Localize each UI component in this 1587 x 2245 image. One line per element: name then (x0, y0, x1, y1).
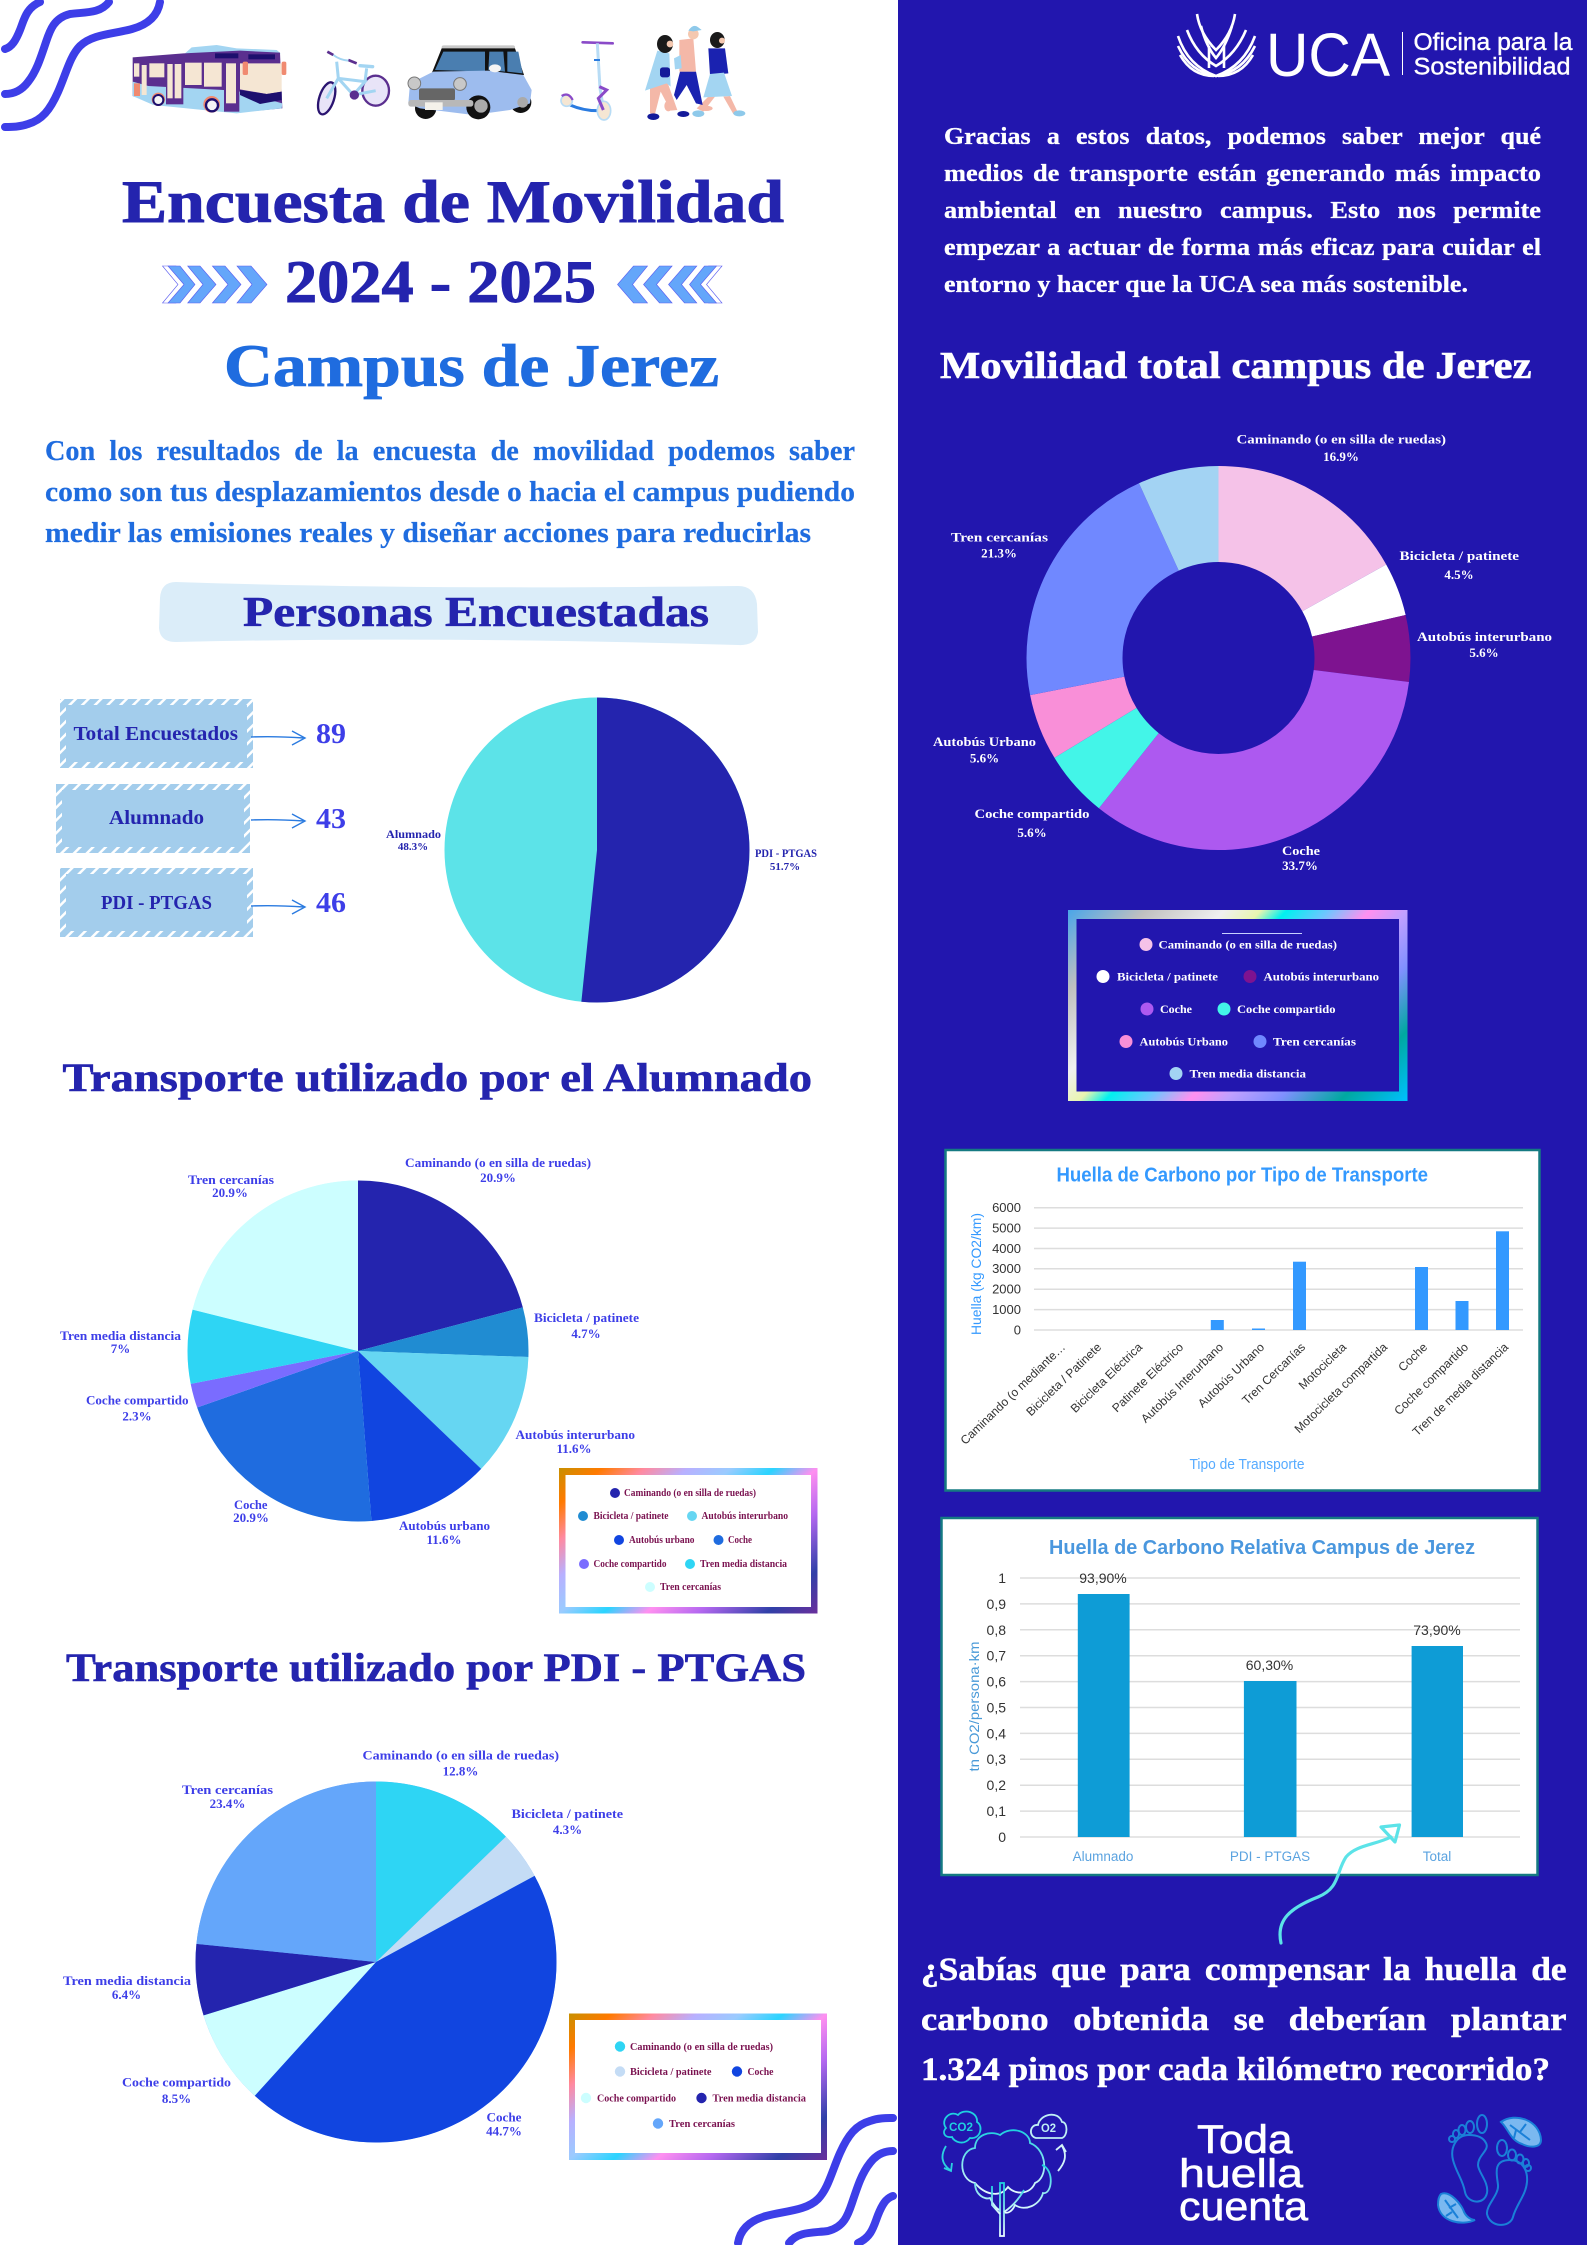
text block: right intro paragraph: medios de transporte están generando más impacto (944, 161, 1541, 187)
y axis labels: 0,8 (987, 1622, 1006, 1638)
text block: right intro paragraph: Gracias a estos datos, podemos saber mejor qué (944, 124, 1541, 150)
text block: right intro paragraph: entorno y hacer que la UCA sea más sostenible. (944, 272, 1468, 298)
pie labels: alumnado: Bicicleta / patinete (534, 1310, 639, 1325)
legend: movilidad total: Bicicleta / patinete (1117, 972, 1218, 984)
logo: Toda huella cuenta: cuenta (1179, 2185, 1309, 2229)
panel: bar chart huella relativa (942, 1518, 1538, 1875)
pie labels: PDI - PTGAS: Tren media distancia (63, 1973, 192, 1988)
logo: Toda huella cuenta: huella (1179, 2152, 1304, 2196)
text block: pinos question: ¿Sabías que para compensar la huella de (921, 1952, 1566, 1988)
pie labels: PDI - PTGAS: 4.3% (553, 1822, 582, 1837)
icon: footprints with leaves (1438, 2115, 1541, 2225)
text block: intro paragraph: Con los resultados de la encuesta de movilidad podemos saber (45, 436, 855, 467)
y axis labels: 0,9 (987, 1596, 1006, 1612)
donut labels: Tren cercanías (951, 530, 1048, 544)
legend: PDI - PTGAS: Bicicleta / patinete (630, 2067, 712, 2078)
label: Alumnado 48.3% (386, 829, 441, 853)
arrow: curved cyan arrow (1280, 1825, 1400, 1943)
pie labels: PDI - PTGAS: 23.4% (210, 1796, 245, 1811)
y axis title: Huella (kg CO2/km) (968, 1213, 984, 1335)
y axis labels (987, 1570, 1006, 1845)
x axis labels (1073, 1849, 1451, 1864)
pie labels: PDI - PTGAS: Coche (486, 2110, 522, 2124)
donut labels: 33.7% (1282, 858, 1318, 873)
pie labels: alumnado: 2.3% (122, 1408, 152, 1424)
pie labels: PDI - PTGAS: Caminando (o en silla de ruedas) (362, 1748, 559, 1762)
donut chart: movilidad total (1026, 466, 1410, 850)
arrow to 89 (251, 731, 305, 745)
legend: movilidad total: Autobús interurbano (1264, 972, 1379, 984)
donut labels: 5.6% (1469, 645, 1499, 660)
text block: pinos question (921, 1952, 1566, 2088)
y axis labels: 0,1 (987, 1803, 1006, 1819)
title: 2024 - 2025: 2024 - 2025 (285, 249, 596, 315)
x axis title: Tipo de Transporte (1190, 1456, 1304, 1473)
icon: chevrons right (618, 266, 722, 303)
legend: PDI - PTGAS: Caminando (o en silla de ruedas) (630, 2042, 773, 2053)
y axis title: tn CO2/persona·km (966, 1642, 982, 1772)
data labels: 60,30% (1246, 1657, 1293, 1673)
heading: Movilidad total campus de Jerez: Movilidad total campus de Jerez (940, 345, 1532, 387)
x axis labels: Motocicleta compartida (1292, 1340, 1390, 1436)
legend: alumnado: Caminando (o en silla de ruedas) (624, 1488, 756, 1499)
heading: Transporte utilizado por PDI - PTGAS: Transporte utilizado por PDI - PTGAS (66, 1645, 806, 1690)
pie labels: PDI - PTGAS: Coche compartido (122, 2074, 231, 2090)
legend: alumnado: Autobús urbano (629, 1535, 694, 1546)
data labels: 93,90% (1079, 1570, 1127, 1586)
legend: movilidad total: Caminando (o en silla de ruedas) (1158, 940, 1337, 952)
y axis labels: 1 (998, 1570, 1006, 1586)
logo: Oficina para la Sostenibilidad: Oficina para la (1414, 29, 1573, 56)
x axis labels: Coche (1395, 1340, 1430, 1374)
decoration: top-left waves (5, 2, 160, 127)
chart title: Huella de Carbono Relativa Campus de Jerez (1049, 1537, 1475, 1559)
text block: pinos question: 1.324 pinos por cada kilómetro recorrido? (921, 2052, 1550, 2088)
legend: alumnado: Tren media distancia (700, 1559, 787, 1570)
y axis labels: 0 (1014, 1322, 1021, 1338)
logo: Oficina para la Sostenibilidad (1402, 29, 1573, 80)
donut labels: 4.5% (1444, 567, 1474, 582)
x axis labels: Autobús Interurbano (1138, 1340, 1226, 1426)
box: PDI - PTGAS (66, 874, 247, 931)
legend: alumnado: Tren cercanías (660, 1582, 721, 1593)
number: 46: 46 (316, 888, 346, 919)
text block: right intro paragraph: empezar a actuar de forma más eficaz para cuidar el (944, 235, 1541, 261)
legend: PDI - PTGAS: Tren media distancia (712, 2094, 806, 2104)
pie labels: alumnado: 20.9% (212, 1185, 248, 1200)
text block: pinos question: carbono obtenida se deberían plantar (921, 2002, 1566, 2038)
pie labels: alumnado: Tren cercanías (188, 1172, 274, 1187)
icon: blue car (408, 45, 532, 119)
pie chart: alumnado (188, 1180, 528, 1522)
label: O2: O2 (1041, 2123, 1056, 2135)
y axis labels: 4000 (992, 1241, 1021, 1256)
donut labels: Coche (1282, 843, 1320, 858)
pie labels: alumnado: Tren media distancia (60, 1328, 182, 1343)
text block: intro paragraph: medir las emisiones reales y diseñar acciones para reducirlas (45, 518, 811, 549)
logo: Toda huella cuenta (1179, 2118, 1309, 2229)
pie labels: alumnado: Autobús interurbano (516, 1427, 635, 1442)
donut labels: Bicicleta / patinete (1400, 548, 1519, 563)
legend: alumnado: Autobús interurbano (702, 1511, 788, 1522)
legend: alumnado: Coche compartido (594, 1559, 666, 1570)
pie labels: PDI - PTGAS: 44.7% (486, 2124, 522, 2138)
pie chart: PDI - PTGAS (196, 1782, 556, 2142)
legend: movilidad total: Tren cercanías (1273, 1036, 1357, 1048)
donut labels: Autobús Urbano (933, 734, 1036, 749)
x axis labels: Coche compartido (1391, 1340, 1471, 1418)
y axis labels: 0,6 (987, 1674, 1006, 1690)
label: CO2: CO2 (949, 2122, 973, 2134)
legend: movilidad total: Autobús Urbano (1140, 1036, 1228, 1048)
x axis labels: Autobús Urbano (1195, 1340, 1267, 1410)
bars (1078, 1594, 1463, 1837)
pie labels: alumnado: 11.6% (556, 1441, 592, 1456)
text block: right intro paragraph: ambiental en nuestro campus. Esto nos permite (944, 198, 1541, 224)
y axis labels: 0,5 (987, 1700, 1006, 1716)
legend: PDI - PTGAS: Tren cercanías (669, 2119, 735, 2130)
heading: Transporte utilizado por el Alumnado: Transporte utilizado por el Alumnado (62, 1055, 812, 1100)
pie labels: PDI - PTGAS: 6.4% (112, 1987, 141, 2002)
panel: right blue column (898, 0, 1587, 2245)
legend: alumnado: Coche (728, 1535, 752, 1546)
pie labels: alumnado: Coche (234, 1497, 268, 1512)
donut labels: Autobús interurbano (1417, 629, 1552, 644)
donut labels: 21.3% (981, 546, 1017, 560)
data labels: 73,90% (1413, 1622, 1461, 1638)
x axis labels: Alumnado (1073, 1849, 1133, 1864)
arrow to 46 (251, 900, 305, 914)
y axis labels: 3000 (992, 1261, 1021, 1276)
donut labels: 5.6% (970, 750, 999, 766)
text block: intro paragraph: como son tus desplazamientos desde o hacia el campus pudiendo (45, 477, 855, 508)
pie labels: alumnado: 7% (111, 1341, 130, 1356)
label: Alumnado 48.3%: Alumnado (386, 829, 441, 841)
donut labels: 16.9% (1323, 449, 1359, 464)
pie labels: alumnado (60, 1155, 639, 1547)
label: PDI - PTGAS 51.7%: 51.7% (770, 861, 800, 873)
pie labels: PDI - PTGAS: 8.5% (162, 2091, 191, 2106)
y axis labels: 0,3 (987, 1751, 1006, 1767)
panel: survey counts (62, 705, 346, 931)
icon: scooter (561, 42, 613, 120)
pie labels: alumnado: Autobús urbano (399, 1518, 490, 1533)
pie labels: PDI - PTGAS: Bicicleta / patinete (512, 1806, 623, 1821)
box: Alumnado (62, 790, 244, 847)
donut labels (933, 432, 1552, 873)
legend: alumnado (559, 1468, 818, 1614)
title: Encuesta de Movilidad: Encuesta de Movilidad (122, 169, 784, 235)
x axis labels (958, 1340, 1511, 1447)
pie labels: alumnado: 4.7% (571, 1326, 601, 1341)
y axis labels: 0,4 (987, 1726, 1006, 1742)
donut labels: 5.6% (1017, 825, 1047, 840)
y axis labels: 6000 (992, 1200, 1021, 1215)
box: PDI - PTGAS: PDI - PTGAS (101, 892, 212, 914)
x axis labels: Caminando (o mediante… (958, 1340, 1068, 1447)
logo: Toda huella cuenta: Toda (1197, 2118, 1293, 2162)
x axis labels: Total (1423, 1849, 1451, 1864)
pie labels: alumnado: 20.9% (233, 1510, 269, 1525)
label: PDI - PTGAS 51.7%: PDI - PTGAS (755, 848, 817, 860)
chart title: Huella de Carbono por Tipo de Transporte (1056, 1164, 1428, 1186)
panel: bar chart huella por tipo de transporte (946, 1150, 1540, 1490)
box: Alumnado: Alumnado (109, 807, 204, 829)
label: PDI - PTGAS 51.7% (755, 848, 817, 873)
pie labels: alumnado: 11.6% (426, 1532, 462, 1547)
x axis labels: Tren Cercanías (1239, 1340, 1308, 1407)
legend: movilidad total (1068, 910, 1408, 1101)
y axis labels: 0,7 (987, 1648, 1006, 1664)
donut labels: Caminando (o en silla de ruedas) (1236, 432, 1446, 446)
icon: bicycle (315, 52, 389, 116)
heading: Personas Encuestadas: Personas Encuestadas (243, 590, 709, 636)
label: Alumnado 48.3%: 48.3% (398, 841, 428, 853)
pill: Personas Encuestadas (159, 582, 758, 645)
icon: chevrons left (162, 266, 267, 303)
donut labels: Coche compartido (974, 806, 1090, 821)
y axis labels: 0 (998, 1829, 1006, 1845)
box: Total Encuestados (66, 705, 247, 762)
pie labels: alumnado: Caminando (o en silla de ruedas) (405, 1155, 591, 1170)
box: Total Encuestados: Total Encuestados (74, 723, 238, 745)
legend: PDI - PTGAS: Coche (748, 2067, 774, 2078)
number: 89: 89 (316, 719, 346, 750)
subtitle: Campus de Jerez: Campus de Jerez (224, 333, 719, 399)
icon: bus (133, 45, 286, 113)
x axis labels: Bicicleta Eléctrica (1068, 1340, 1145, 1415)
text block: right intro paragraph (944, 124, 1541, 298)
y axis labels: 5000 (992, 1220, 1021, 1236)
legend: movilidad total: Tren media distancia (1190, 1068, 1306, 1080)
legend: movilidad total: Coche (1160, 1004, 1192, 1016)
icon: three walking people (645, 26, 745, 120)
arrow to 43 (251, 814, 305, 828)
y axis labels: 2000 (992, 1282, 1021, 1296)
pie labels: PDI - PTGAS: 12.8% (443, 1764, 478, 1778)
pie labels: alumnado: 20.9% (480, 1170, 516, 1185)
legend: movilidad total: Coche compartido (1237, 1004, 1336, 1016)
x axis labels: PDI - PTGAS (1230, 1849, 1310, 1864)
pie labels: alumnado: Coche compartido (86, 1392, 188, 1408)
decoration: bottom waves (738, 2118, 893, 2243)
icon: tree with CO2 and O2 (943, 2111, 1066, 2236)
x axis labels: Tren de media distancia (1410, 1340, 1511, 1439)
x axis labels: Bicicleta / Patinete (1023, 1340, 1104, 1419)
pie labels: PDI - PTGAS: Tren cercanías (182, 1782, 273, 1797)
bars (1211, 1231, 1509, 1330)
logo: UCA wordmark: UCA (1266, 21, 1390, 89)
data labels (1079, 1570, 1461, 1673)
logo: Oficina para la Sostenibilidad: Sostenibilidad (1414, 54, 1570, 80)
y axis labels: 0,2 (987, 1777, 1006, 1793)
number: 43: 43 (316, 804, 346, 835)
text block: intro paragraph (45, 436, 855, 549)
legend: alumnado: Bicicleta / patinete (594, 1511, 669, 1522)
legend: PDI - PTGAS (569, 2014, 827, 2160)
legend: PDI - PTGAS: Coche compartido (597, 2094, 676, 2104)
x axis labels: Patinete Eléctrico (1109, 1340, 1186, 1415)
x axis labels: Motocicleta (1296, 1340, 1349, 1392)
pie chart: encuestados (444, 698, 750, 1002)
logo: UCA emblem (1178, 14, 1255, 76)
pie labels: PDI - PTGAS (63, 1748, 623, 2138)
y axis labels (992, 1200, 1021, 1338)
y axis labels: 1000 (992, 1302, 1021, 1317)
